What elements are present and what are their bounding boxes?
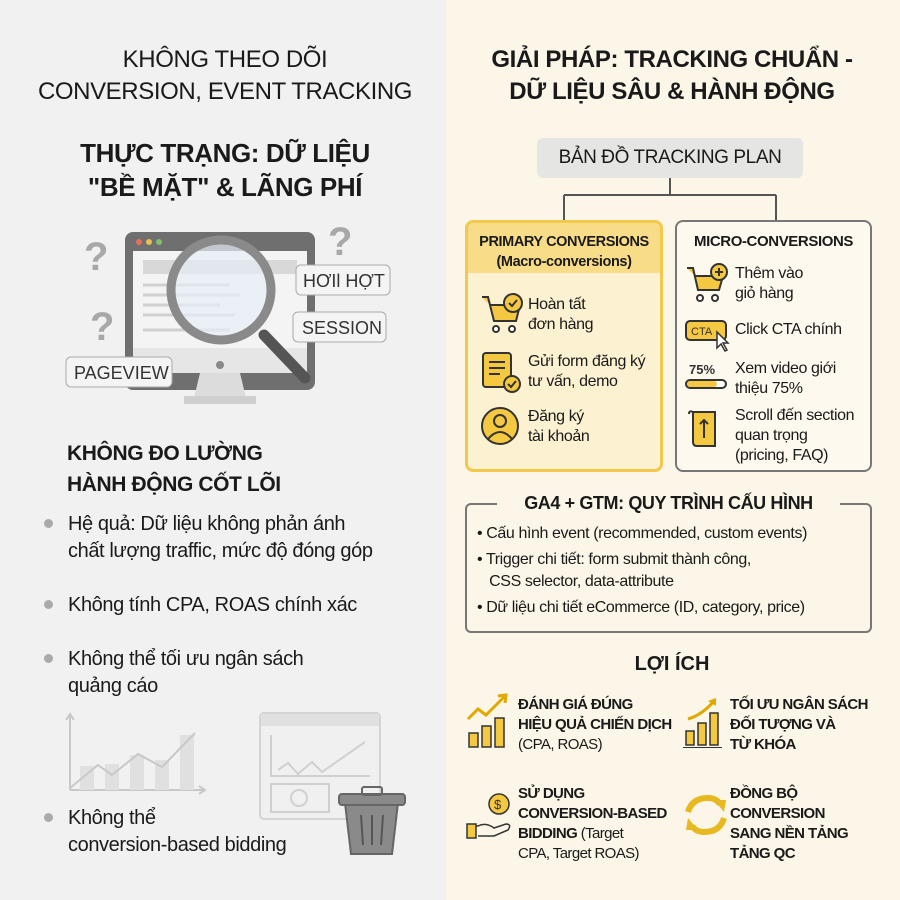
item: video [685, 360, 836, 397]
item: scroll: Scroll đến section [735, 407, 854, 424]
heading GA4: GA4 + GTM: QUY TRÌNH CẤU HÌNH [524, 493, 813, 513]
item: video: Xem video giới [735, 360, 836, 377]
left section heading: HÀNH ĐỘNG CỐT LÕI [67, 473, 281, 496]
left bullets: Không thể tối ưu ngân sách [68, 648, 303, 670]
heading primary: PRIMARY CONVERSIONS [479, 234, 649, 250]
benefit 4 [685, 784, 848, 862]
benefit 1: HIỆU QUẢ CHIẾN DỊCH [518, 716, 672, 733]
benefit 1 [467, 693, 672, 753]
left section heading: KHÔNG ĐO LƯỜNG [67, 442, 262, 465]
panel: micro conversions [675, 220, 872, 472]
item: add to cart: giỏ hàng [735, 285, 793, 302]
item: account: Đăng ký [528, 408, 584, 425]
right title: GIẢI PHÁP: TRACKING CHUẨN - [491, 46, 853, 73]
GA4 bullets: • Dữ liệu chi tiết eCommerce (ID, category, price) [477, 599, 805, 616]
benefit 2: TỪ KHÓA [730, 736, 796, 753]
panel: primary conversions [465, 220, 663, 472]
benefit 2 [683, 696, 868, 753]
GA4 bullets: • Cấu hình event (recommended, custom events) [477, 525, 807, 542]
panel: GA4 + GTM [465, 503, 872, 633]
benefit 1: (CPA, ROAS) [518, 736, 602, 753]
benefit 3 [466, 784, 667, 862]
illustration: monitor with magnifier: ? [84, 235, 108, 279]
benefit 4: TẢNG QC [730, 845, 795, 862]
left bullets: conversion-based bidding [68, 834, 286, 856]
left bullets: Không thể [68, 807, 156, 829]
left subtitle: THỰC TRẠNG: DỮ LIỆU [80, 138, 370, 168]
item: form: Gửi form đăng ký [528, 353, 645, 370]
illustration: monitor with magnifier: HƠIl HỢT [303, 271, 385, 291]
item: account [481, 407, 589, 445]
item: order: Hoàn tất [528, 296, 585, 313]
benefit 3: BIDDING (Target [518, 825, 623, 842]
left subtitle [80, 138, 370, 202]
left bullets: chất lượng traffic, mức độ đóng góp [68, 540, 373, 562]
benefit 2: ĐỐI TƯỢNG VÀ [730, 716, 836, 733]
item: order: đơn hàng [528, 316, 593, 333]
faded charts illustration [65, 712, 406, 855]
GA4 bullets: CSS selector, data-attribute [489, 573, 674, 590]
item: video: 75% [689, 362, 715, 377]
left title: KHÔNG THEO DÕI [123, 46, 327, 73]
tracking plan box [537, 138, 803, 178]
tracking plan box: BẢN ĐỒ TRACKING PLAN [559, 147, 781, 168]
benefit 3: CPA, Target ROAS) [518, 845, 639, 862]
item: account: tài khoản [528, 428, 589, 445]
left subtitle: "BỀ MẶT" & LÃNG PHÍ [88, 172, 362, 202]
illustration: monitor with magnifier: ? [90, 305, 114, 349]
item: order [482, 293, 593, 333]
heading primary: (Macro-conversions) [496, 254, 632, 270]
benefit 4: SANG NỀN TẢNG [730, 825, 848, 842]
item: form: tư vấn, demo [528, 373, 618, 390]
benefit 3: SỬ DỤNG [518, 785, 585, 802]
item: CTA [685, 320, 842, 352]
right title [491, 45, 853, 105]
left title [38, 46, 412, 105]
heading: benefits: LỢI ÍCH [635, 653, 709, 675]
item: add to cart: Thêm vào [735, 265, 803, 282]
left title: CONVERSION, EVENT TRACKING [38, 78, 412, 105]
benefit 4: CONVERSION [730, 805, 825, 822]
item: form [482, 352, 646, 393]
heading primary [468, 223, 660, 273]
illustration: monitor with magnifier [66, 220, 390, 404]
GA4 bullets: • Trigger chi tiết: form submit thành công, [477, 551, 751, 568]
benefit 1: ĐÁNH GIÁ ĐÚNG [518, 696, 633, 713]
item: CTA: CTA [691, 326, 713, 338]
GA4 bullets [477, 525, 807, 616]
illustration: monitor with magnifier: ? [328, 220, 352, 264]
left bullets: quảng cáo [68, 675, 158, 697]
heading micro: MICRO-CONVERSIONS [694, 233, 853, 250]
left section heading [67, 440, 281, 496]
benefit 3: $ [494, 797, 502, 812]
item: add to cart [687, 263, 803, 302]
left bullets: Không tính CPA, ROAS chính xác [68, 594, 357, 616]
item: scroll [688, 407, 854, 464]
illustration: monitor with magnifier: SESSION [302, 318, 382, 338]
item: scroll: (pricing, FAQ) [735, 447, 828, 464]
left bullets [44, 513, 373, 856]
item: CTA: Click CTA chính [735, 321, 842, 338]
benefit 3: CONVERSION-BASED [518, 805, 667, 822]
item: video: thiệu 75% [735, 380, 803, 397]
connector lines [563, 178, 777, 220]
illustration: monitor with magnifier: PAGEVIEW [74, 363, 169, 383]
item: scroll: quan trọng [735, 427, 808, 444]
benefit 2: TỐI ƯU NGÂN SÁCH [730, 696, 868, 713]
background right [446, 0, 900, 900]
background left [0, 0, 446, 900]
right title: DỮ LIỆU SÂU & HÀNH ĐỘNG [509, 78, 835, 105]
left bullets: Hệ quả: Dữ liệu không phản ánh [68, 513, 345, 535]
benefit 4: ĐỒNG BỘ [730, 785, 797, 802]
